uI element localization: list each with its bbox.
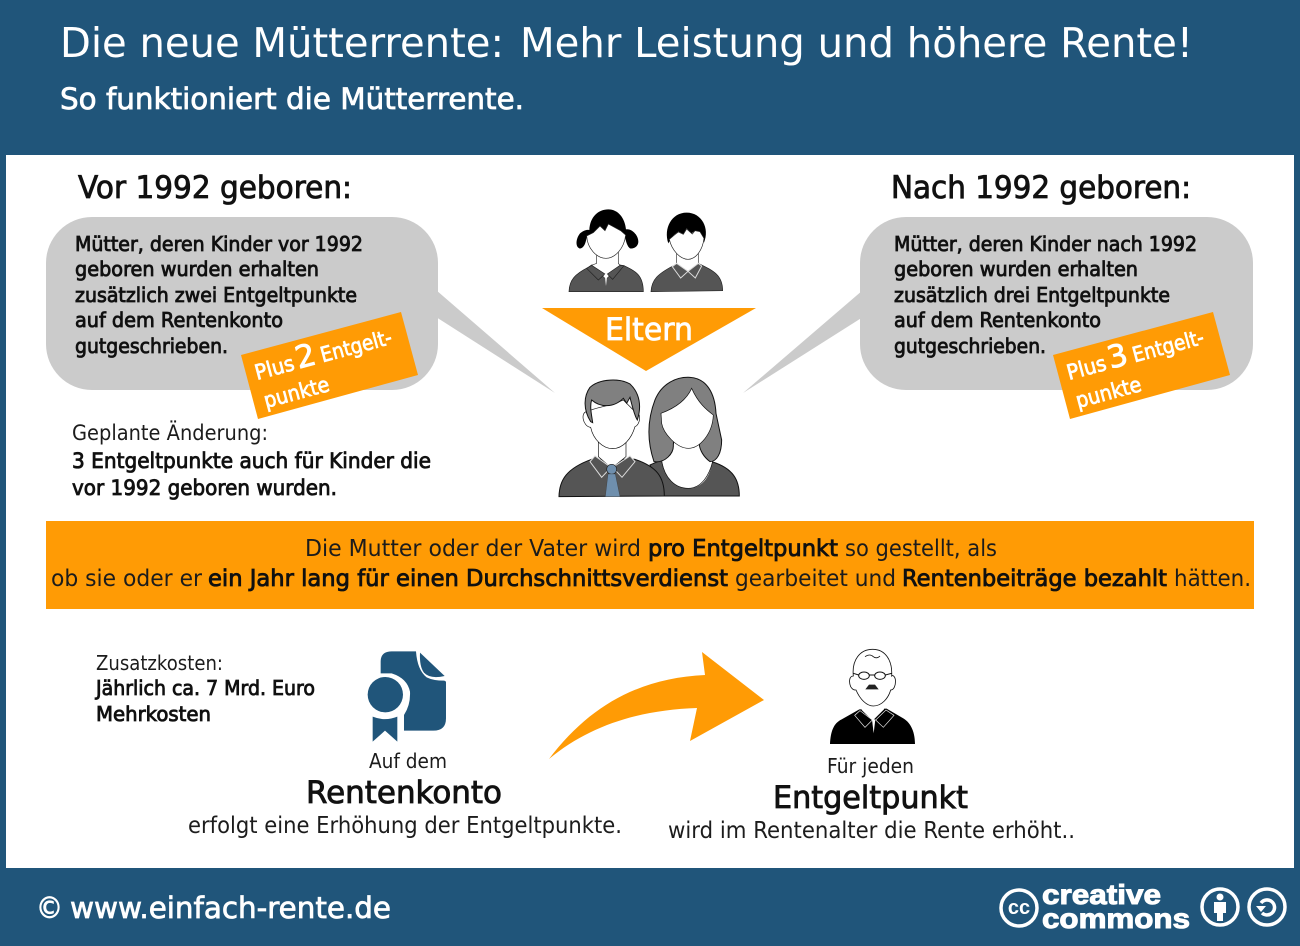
badge: plus 3: punkte xyxy=(1073,372,1144,413)
logo: creative commons xyxy=(1001,879,1285,934)
speech bubble: after 1992: auf dem Rentenkonto xyxy=(894,308,1101,332)
logo: creative commons: commons xyxy=(1042,903,1190,934)
text block: Entgeltpunkt: Entgeltpunkt xyxy=(773,780,968,816)
title: Die neue Mütterrente: xyxy=(60,19,504,67)
info band: explanation xyxy=(46,521,1254,609)
title: Mehr Leistung und höhere Rente! xyxy=(520,19,1193,67)
heading: after 1992: Nach 1992 geboren: xyxy=(891,170,1191,206)
speech bubble: before 1992: auf dem Rentenkonto xyxy=(75,308,283,332)
info band: explanation: Die Mutter oder der Vater wird xyxy=(305,536,641,562)
text block: additional costs: Zusatzkosten: xyxy=(96,651,223,675)
badge: plus 2: Entgelt- xyxy=(318,325,394,367)
arrow xyxy=(549,652,764,759)
badge: plus 3 xyxy=(1053,312,1230,419)
icon: Eltern triangle: Eltern xyxy=(605,312,693,348)
subtitle: So funktioniert die Mütterrente. xyxy=(60,82,524,116)
speech bubble: before 1992: geboren wurden erhalten xyxy=(75,257,319,281)
text block: additional costs: Mehrkosten xyxy=(96,702,211,726)
info band: explanation: pro Entgeltpunkt xyxy=(648,536,838,562)
badge: plus 3: 3 xyxy=(1103,337,1132,377)
text block: Entgeltpunkt xyxy=(668,754,1075,844)
text block: Rentenkonto: Auf dem xyxy=(369,749,447,773)
info band: explanation: ob sie oder er xyxy=(51,566,203,592)
footer: copyright: www.einfach-rente.de xyxy=(70,891,391,925)
speech bubble: before 1992: zusätzlich zwei Entgeltpunkte xyxy=(75,283,357,307)
text block: planned change: vor 1992 geboren wurden. xyxy=(72,476,337,500)
speech bubble: before 1992: gutgeschrieben. xyxy=(75,334,228,358)
title xyxy=(60,19,1193,67)
info band: explanation: ein Jahr lang für einen Durchschnittsverdienst xyxy=(208,566,728,592)
logo: creative commons: creative xyxy=(1042,879,1161,910)
icon: Eltern triangle xyxy=(542,308,756,371)
heading: before 1992: Vor 1992 geboren: xyxy=(78,170,352,206)
badge: plus 3: Entgelt- xyxy=(1130,325,1206,367)
speech bubble: after 1992: Mütter, deren Kinder nach 1992 xyxy=(894,232,1197,256)
icon: pensioner xyxy=(830,649,915,744)
text block: Rentenkonto: Rentenkonto xyxy=(306,775,502,811)
info band: explanation: so gestellt, als xyxy=(845,536,997,562)
icon: document with seal xyxy=(368,651,446,742)
badge: plus 3: Plus xyxy=(1064,351,1109,385)
text block: additional costs xyxy=(94,651,315,726)
info band: explanation: Rentenbeiträge bezahlt xyxy=(902,566,1167,592)
text block: Entgeltpunkt: wird im Rentenalter die Rente erhöht.. xyxy=(668,818,1075,844)
speech bubble: after 1992 xyxy=(743,217,1253,393)
text block: planned change: Geplante Änderung: xyxy=(72,420,268,445)
text block: planned change: 3 Entgeltpunkte auch für Kinder die xyxy=(72,449,431,473)
logo: creative commons: cc xyxy=(1008,897,1030,919)
speech bubble: after 1992: gutgeschrieben. xyxy=(894,334,1046,358)
text block: planned change xyxy=(72,420,431,500)
badge: plus 2: 2 xyxy=(291,337,320,377)
panel: white content area xyxy=(6,155,1294,868)
text block: Rentenkonto: erfolgt eine Erhöhung der Entgeltpunkte. xyxy=(188,813,622,839)
speech bubble: after 1992: geboren wurden erhalten xyxy=(894,257,1138,281)
badge: plus 2: punkte xyxy=(261,372,332,413)
badge: plus 2: Plus xyxy=(252,351,297,385)
speech bubble: after 1992: zusätzlich drei Entgeltpunkte xyxy=(894,283,1170,307)
badge: plus 2 xyxy=(241,312,418,419)
text block: Rentenkonto xyxy=(188,749,622,839)
speech bubble: before 1992: Mütter, deren Kinder vor 1992 xyxy=(75,232,363,256)
info band: explanation: gearbeitet und xyxy=(735,566,896,592)
footer: copyright: © xyxy=(36,891,63,925)
icon: parents xyxy=(559,377,739,497)
icon: children xyxy=(569,209,723,292)
speech bubble: before 1992 xyxy=(46,217,555,393)
info band: explanation: hätten. xyxy=(1174,566,1251,592)
text block: additional costs: Jährlich ca. 7 Mrd. Euro xyxy=(94,676,315,700)
text block: Entgeltpunkt: Für jeden xyxy=(827,754,914,778)
